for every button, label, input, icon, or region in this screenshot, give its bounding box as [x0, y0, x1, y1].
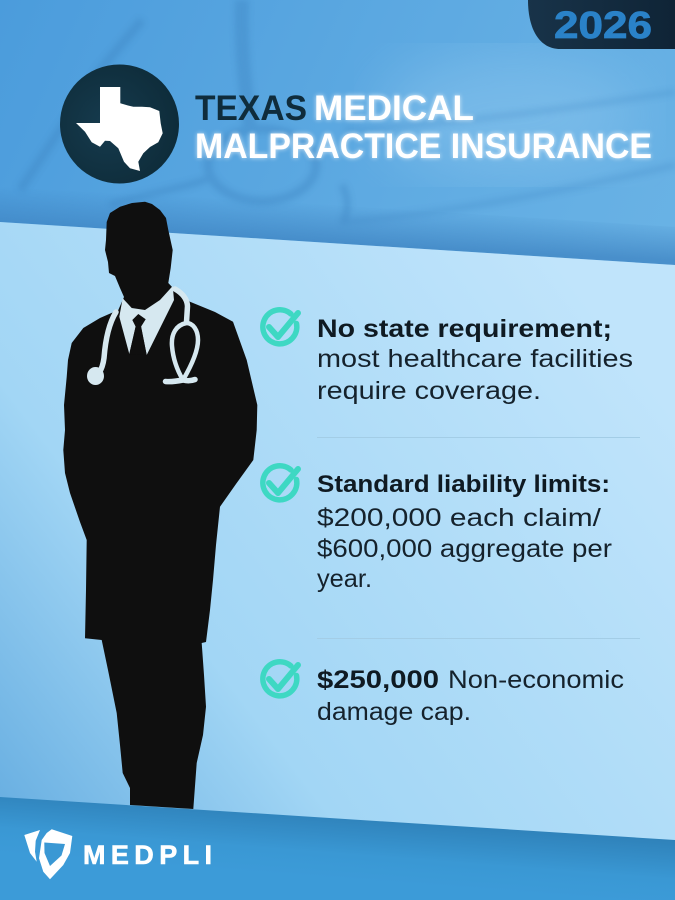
item 2: standard liability limits [263, 466, 612, 593]
logo: MEDPLI shield and wordmark [24, 829, 212, 879]
icon: Texas state in dark circle [60, 64, 179, 184]
icon: check 3 [263, 662, 298, 696]
necktie [129, 314, 147, 355]
title: MALPRACTICE INSURANCE [195, 127, 652, 166]
item 3: non-economic damage cap: $250,000 [317, 666, 439, 694]
item 3: non-economic damage cap [263, 662, 624, 726]
panel: light blue content area [0, 222, 675, 842]
year badge [528, 0, 675, 49]
stethoscope [99, 289, 198, 382]
year badge: 2026 [554, 5, 652, 47]
item 1: no state requirement: No state requirement; [317, 315, 612, 343]
item 1: no state requirement [263, 310, 633, 405]
title: MALPRACTICE INSURANCE [195, 127, 652, 166]
item 2: standard liability limits: year. [317, 565, 372, 593]
item 3: non-economic damage cap: Non-economic [448, 666, 624, 694]
item 3: non-economic damage cap: damage cap. [317, 698, 471, 726]
title [195, 89, 652, 166]
title: MEDICAL [314, 89, 474, 128]
item 2: standard liability limits: $600,000 aggregate per [317, 535, 612, 563]
doctor silhouette with stethoscope [63, 202, 257, 809]
logo: MEDPLI shield and wordmark: MEDPLI [83, 840, 212, 870]
shirt collar [119, 286, 174, 355]
item 2: standard liability limits: Standard liability limits: [317, 471, 610, 498]
item 2: standard liability limits: $200,000 each claim/ [317, 504, 601, 532]
title: MEDICAL [314, 89, 474, 128]
panel: footer band [0, 797, 675, 900]
item 1: no state requirement: require coverage. [317, 377, 541, 405]
item 1: no state requirement: most healthcare facilities [317, 345, 633, 373]
icon: check 2 [263, 466, 298, 500]
icon: check 1 [263, 310, 298, 344]
title: TEXAS [195, 89, 307, 128]
